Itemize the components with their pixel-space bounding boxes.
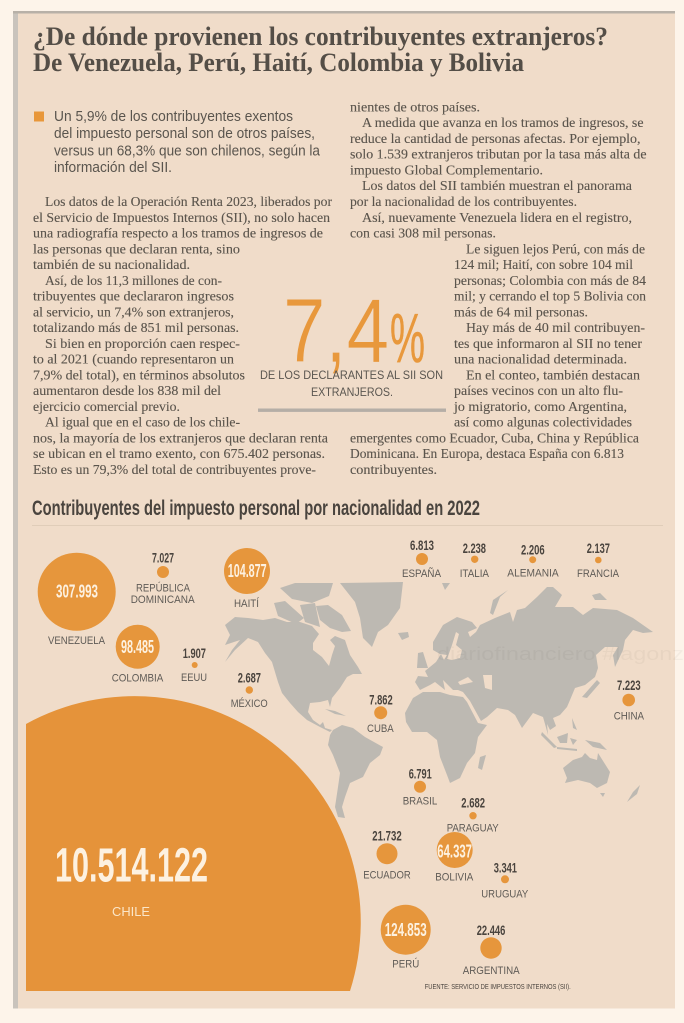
text block: right column: con casi 308 mil personas. — [350, 226, 496, 242]
Southeast Asia and Oceania — [541, 732, 557, 748]
bubble: España: ESPAÑA — [402, 567, 442, 580]
bubble: Colombia: COLOMBIA — [112, 673, 164, 685]
text block: left column: también de su nacionalidad. — [33, 258, 190, 273]
bubble: Paraguay — [447, 794, 499, 835]
text block: right column: En el conteo, también destacan — [466, 368, 640, 383]
stat caption: DE LOS DECLARANTES AL SII SON — [260, 368, 443, 382]
source note: FUENTE: SERVICIO DE IMPUESTOS INTERNOS (SII). — [425, 982, 571, 991]
callout text: información del SII. — [54, 160, 172, 176]
bubble: República Dominicana: 7.027 — [152, 550, 174, 566]
text block: right column: 124 mil; Haití, con sobre 104 mil — [454, 258, 633, 273]
bubble: Chile: 10.514.122 — [55, 840, 208, 892]
text block: left column: ejercicio comercial previo. — [33, 400, 180, 415]
text block: right column: tes que informaron al SII no tener — [454, 337, 642, 352]
South America — [328, 725, 383, 818]
bubble: China — [614, 677, 645, 722]
bubble: México — [231, 670, 268, 710]
bubble: Colombia: 98.485 — [121, 637, 154, 657]
bubble: Alemania — [507, 542, 559, 580]
world map — [225, 582, 653, 818]
bubble: Francia: FRANCIA — [577, 568, 620, 580]
text block: right column: emergentes como Ecuador, Cuba, China y República — [350, 431, 640, 446]
bubble: Ecuador: ECUADOR — [363, 869, 411, 881]
bubble: Colombia — [112, 625, 164, 685]
text block: left column: nos, la mayoría de los extranjeros que declaran renta — [33, 431, 329, 446]
bubble: Perú: 124.853 — [385, 920, 427, 940]
text block: left column: aumentaron desde los 838 mil del — [33, 384, 221, 399]
bubble: Chile: CHILE — [112, 904, 150, 919]
text block: right column: países vecinos con un alto flu- — [454, 384, 623, 399]
text block: left column: el Servicio de Impuestos Internos (SII), no solo hacen — [33, 211, 330, 226]
title: De Venezuela, Perú, Haití, Colombia y Bolivia — [33, 48, 524, 77]
bubble: Paraguay: 2.682 — [461, 794, 485, 810]
bubble: China: CHINA — [614, 710, 645, 722]
bubble: Cuba: 7.862 — [369, 692, 393, 708]
bubble: República Dominicana: REPÚBLICA — [136, 582, 191, 595]
Greenland — [340, 582, 403, 647]
text block: left column: totalizando más de 851 mil personas. — [33, 321, 239, 336]
text block: right column: nientes de otros países. — [350, 100, 480, 115]
callout text: del impuesto personal son de otros países, — [54, 126, 315, 142]
watermark: diariofinanciero #lagonz — [437, 644, 684, 664]
bubble: Brasil — [403, 766, 437, 807]
title — [33, 22, 608, 77]
bubble: Venezuela — [38, 553, 116, 647]
text block: right column: así como algunas colectividades — [454, 416, 632, 431]
text block: right column: Le siguen lejos Perú, con más de — [466, 242, 645, 257]
text block: left column: una radiografía respecto a los tramos de ingresos de — [33, 226, 323, 242]
bubble: EEUU: EEUU — [181, 672, 207, 684]
bubble: Brasil: 6.791 — [409, 766, 432, 782]
bubble: Ecuador — [363, 828, 411, 881]
text block: left column: Si bien en proporción caen respec- — [45, 337, 240, 352]
bubble: Italia — [460, 540, 490, 580]
bubble: EEUU: 1.907 — [183, 645, 206, 661]
stat number: % — [390, 299, 425, 377]
text block: right column: mil; y cerrando el top 5 Bolivia con — [454, 290, 646, 305]
text block: right column: una nacionalidad determinada. — [454, 353, 627, 368]
title: ¿De dónde provienen los contribuyentes extranjeros? — [33, 22, 608, 51]
text block: right column: A medida que avanza en los tramos de ingresos, se — [362, 116, 644, 131]
stat number: 7,4 — [283, 281, 389, 382]
text block: right column — [350, 100, 646, 478]
text block: right column: por la nacionalidad de los contribuyentes. — [350, 195, 577, 210]
bubble: Italia: 2.238 — [463, 540, 486, 556]
text block: right column: más de 64 mil personas. — [454, 305, 588, 320]
text block: right column: impuesto Global Complementario. — [350, 164, 543, 178]
bubble: Bolivia: 64.337 — [437, 842, 472, 862]
callout: summary — [34, 109, 321, 176]
text block: right column: Dominicana. En Europa, destaca España con 6.813 — [350, 447, 624, 462]
bubble: Francia: 2.137 — [587, 540, 610, 556]
bubble: Chile — [26, 696, 361, 991]
text block: left column: to al 2021 (cuando representaron un — [33, 353, 234, 368]
text block: left column — [33, 195, 332, 478]
bubble: Argentina — [463, 922, 520, 977]
callout text: versus un 68,3% que son chilenos, según la — [54, 144, 321, 160]
bubble: Uruguay: URUGUAY — [481, 889, 529, 901]
text block: right column: solo 1.539 extranjeros tributan por la tasa más alta de — [350, 148, 646, 163]
bubble: República Dominicana — [131, 550, 195, 606]
callout text: Un 5,9% de los contribuyentes exentos — [54, 109, 293, 125]
bubble: Bolivia — [435, 832, 474, 884]
bubble: China: 7.223 — [617, 677, 641, 693]
bubble: EEUU — [181, 645, 207, 684]
Eurasia — [415, 587, 653, 735]
text block: right column: Hay más de 40 mil contribuyen- — [466, 321, 645, 336]
bubble: Cuba: CUBA — [367, 723, 394, 735]
text block: left column: 7,9% del total), en términos absolutos — [33, 368, 245, 383]
bubble: Alemania: ALEMANIA — [507, 568, 559, 580]
bubble: República Dominicana: DOMINICANA — [131, 594, 195, 606]
bubble: Brasil: BRASIL — [403, 795, 437, 807]
text block: right column: Los datos del SII también muestran el panorama — [362, 179, 633, 194]
stat caption — [260, 368, 443, 399]
bubble: Haití: 104.877 — [228, 561, 267, 581]
icon: orange square bullet — [34, 112, 44, 122]
bubble: Argentina: ARGENTINA — [463, 965, 520, 977]
bubble: México: 2.687 — [238, 670, 261, 686]
North America — [225, 617, 362, 732]
bubble: México: MÉXICO — [231, 697, 268, 710]
text block: right column: contribuyentes. — [350, 463, 437, 478]
bubble: Perú — [381, 905, 431, 971]
text block: right column: Así, nuevamente Venezuela lidera en el registro, — [362, 211, 632, 226]
bubble: Uruguay — [481, 860, 529, 901]
bubble: Francia — [577, 540, 620, 580]
bubble: Ecuador: 21.732 — [372, 828, 402, 844]
heading: section: Contribuyentes del impuesto personal por nacionalidad en 2022 — [32, 497, 480, 520]
bubble: Perú: PERÚ — [392, 958, 419, 971]
bubble: España — [402, 537, 442, 580]
text block: right column: personas; Colombia con más de 84 — [454, 274, 646, 289]
text block: left column: al servicio, un 7,4% son extranjeros, — [33, 305, 234, 320]
text block: left column: las personas que declaran renta, sino — [33, 242, 240, 257]
bubble: Paraguay: PARAGUAY — [447, 823, 499, 835]
text block: left column: tribuyentes que declararon ingresos — [33, 290, 234, 305]
bubble: España: 6.813 — [410, 537, 434, 553]
text block: right column: jo migratorio, como Argentina, — [453, 400, 627, 415]
text block: left column: se ubican en el tramo exento, con 675.402 personas. — [33, 447, 325, 462]
bubble: Argentina: 22.446 — [477, 922, 505, 938]
bubble: Bolivia: BOLIVIA — [435, 872, 474, 884]
bubble: Venezuela: 307.993 — [56, 582, 98, 602]
text block: left column: Al igual que en el caso de los chile- — [45, 416, 240, 431]
bubble: Haití: HAITÍ — [234, 597, 260, 610]
bubble: Italia: ITALIA — [460, 568, 490, 580]
big stat: 7,4% — [258, 281, 446, 412]
text block: right column: reduce la cantidad de personas afectas. Por ejemplo, — [350, 132, 640, 147]
Africa — [405, 692, 487, 783]
bubble: Haití — [224, 548, 270, 610]
text block: left column: Esto es un 79,3% del total de contribuyentes prove- — [33, 463, 316, 478]
text block: left column: Así, de los 11,3 millones de con- — [45, 274, 222, 289]
bubble: Cuba — [367, 692, 394, 735]
bubble: Alemania: 2.206 — [521, 542, 545, 558]
callout text — [54, 109, 321, 176]
stat caption: EXTRANJEROS. — [311, 385, 393, 399]
bubble: Venezuela: VENEZUELA — [48, 635, 106, 647]
text block: left column: Los datos de la Operación Renta 2023, liberados por — [45, 195, 332, 210]
bubble: Uruguay: 3.341 — [494, 860, 517, 876]
